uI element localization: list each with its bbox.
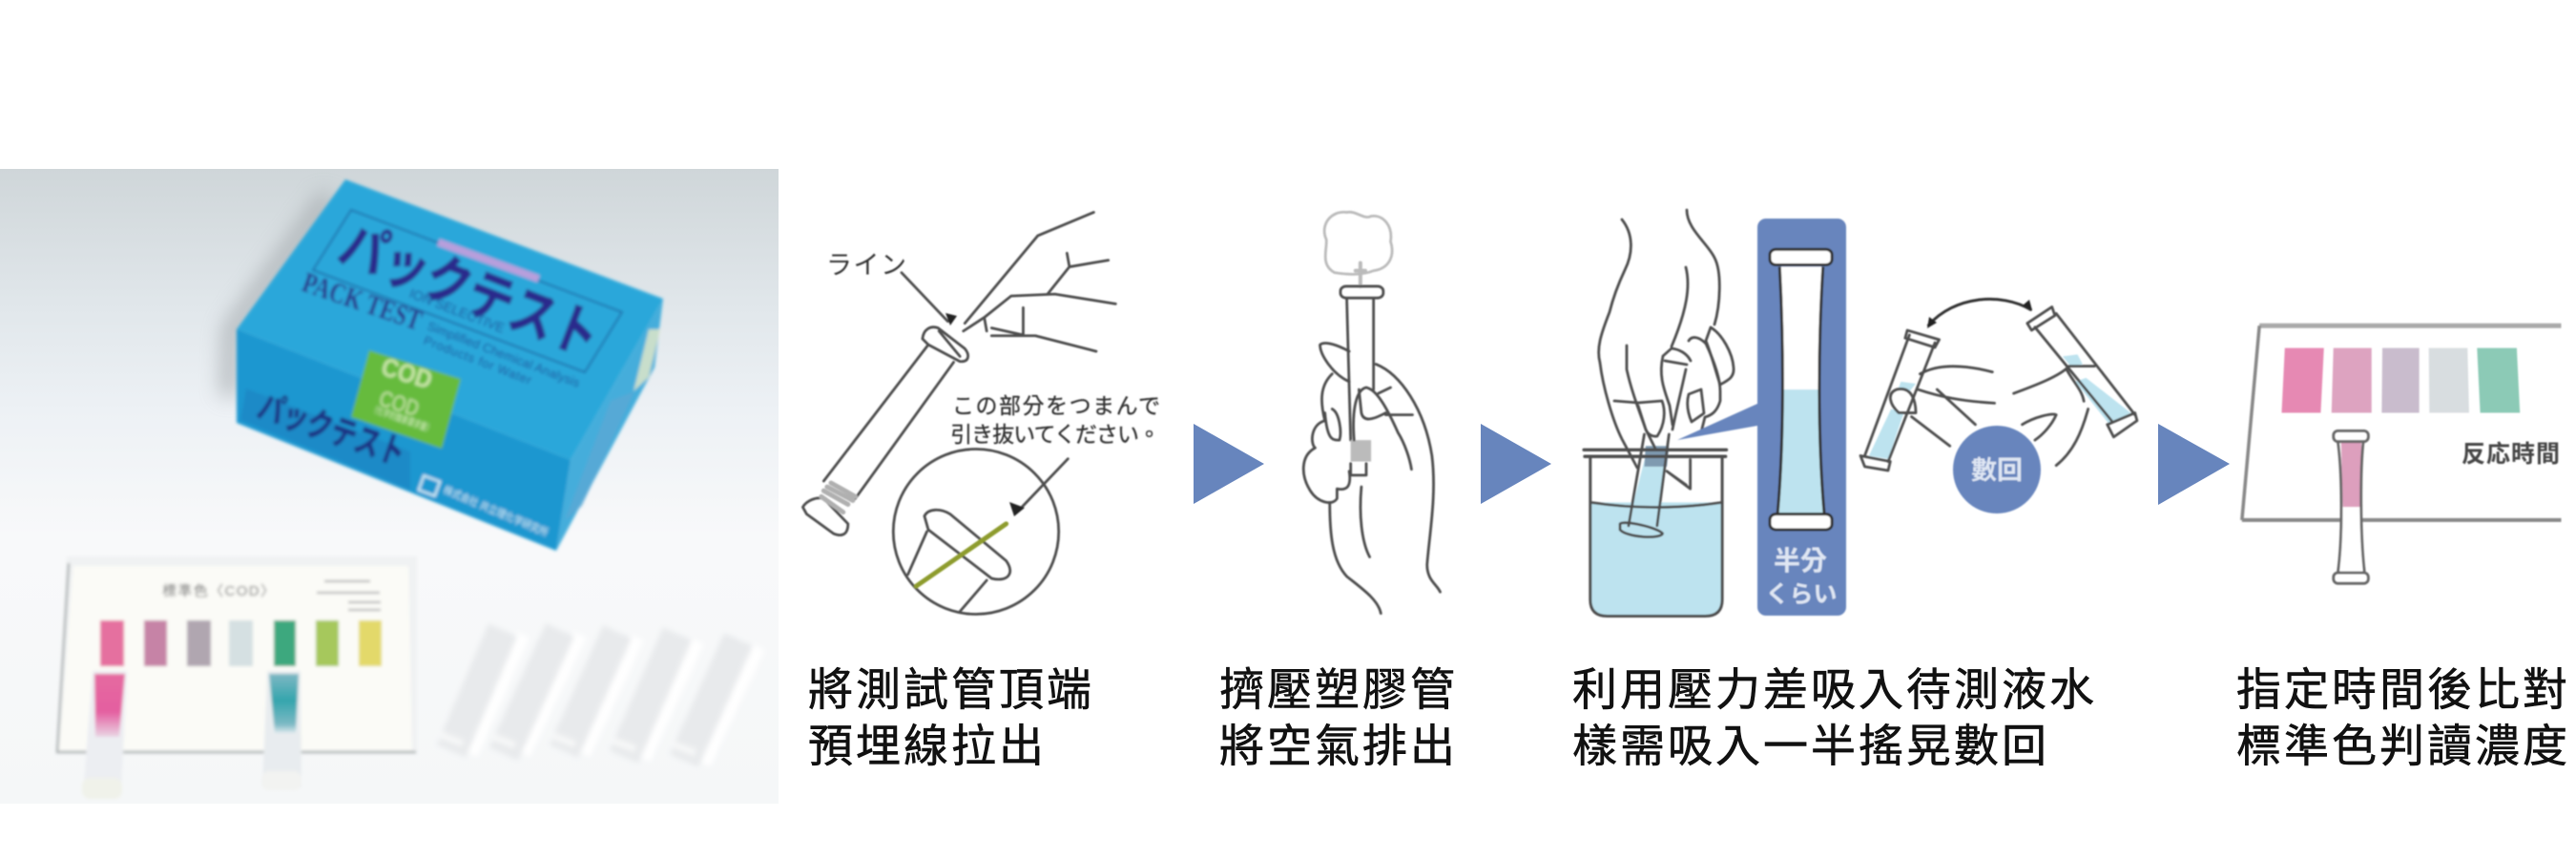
- line arrowhead: [945, 313, 957, 325]
- caption: step 4: [2236, 664, 2570, 771]
- hand holding tube: [1599, 210, 1734, 468]
- company logo: [419, 475, 440, 496]
- caption: step 1: 預埋線拉出: [808, 721, 1047, 771]
- shaking tubes: [1860, 299, 2137, 513]
- caption: step 1: 將測試管頂端: [808, 664, 1094, 715]
- beaker water: [1590, 446, 1722, 616]
- colour swatches: [100, 620, 382, 666]
- panel: product photo: [0, 169, 779, 859]
- COD note: （化学的酸素要求量）: [369, 403, 435, 435]
- caption: step 3: 樣需吸入一半搖晃數回: [1572, 721, 2049, 771]
- half label: 半分: [1774, 546, 1827, 576]
- caption: step 2: 擠壓塑膠管: [1219, 664, 1458, 715]
- caption: step 2: 將空氣排出: [1219, 721, 1458, 771]
- inset arrowhead: [1009, 502, 1025, 516]
- about label: くらい: [1765, 581, 1838, 608]
- circle badge: [1953, 426, 2041, 513]
- teal sample tube: [261, 671, 301, 790]
- sample tube: [2334, 430, 2368, 583]
- illustration: step 4 compare to standard colours: [2242, 325, 2562, 583]
- box subtitle: ION SELECTIVE: [407, 285, 507, 336]
- caption: step 4: 標準色判讀濃度: [2236, 721, 2570, 771]
- circle badge: 數回: [1971, 456, 2023, 485]
- company name: 株式会社 共立理化学研究所: [442, 483, 551, 539]
- arrow 1: [1194, 424, 1264, 504]
- illustration: step 2 squeeze: [1303, 212, 1441, 614]
- instruction: pinch: この部分をつまんで: [952, 393, 1160, 418]
- caption: step 1: [808, 664, 1094, 771]
- COD small: COD: [377, 386, 422, 421]
- box descriptor second line: Products for Water: [422, 333, 534, 388]
- colour chart card: [57, 556, 417, 799]
- callout wedge: [1677, 404, 1757, 440]
- COD big: COD: [378, 352, 436, 395]
- box shadow: [229, 196, 329, 396]
- chart swatches: [2281, 348, 2520, 412]
- half-fill panel: [1757, 219, 1846, 616]
- label: line: ライン: [826, 251, 906, 280]
- box logo katakana: パックテスト: [331, 213, 608, 368]
- caption: step 2: [1219, 664, 1458, 771]
- arrow 2: [1481, 424, 1551, 504]
- caption: step 3: [1572, 664, 2097, 771]
- card title: 標準色〈COD〉: [162, 583, 275, 599]
- caption: step 3: 利用壓力差吸入待測液水: [1572, 664, 2097, 715]
- arrow 3: [2158, 424, 2230, 505]
- half-fill tube: [1770, 249, 1832, 530]
- box descriptor: Simplified Chemical Analysis: [426, 319, 582, 390]
- green COD label: [351, 350, 461, 449]
- caption: step 4: 指定時間後比對: [2236, 664, 2570, 715]
- front navy panel: [240, 388, 410, 490]
- box logo latin: PACK TEST: [299, 266, 426, 337]
- colour chart frame: [2242, 325, 2562, 520]
- five empty tubes: [441, 630, 758, 764]
- pink sample tube: [82, 671, 127, 799]
- illustration: step 1 pull the line: [802, 212, 1160, 614]
- card table: [317, 580, 381, 611]
- illustration: step 3 sample into tube: [1584, 210, 2137, 617]
- instruction: pull: 引き抜いてください。: [950, 422, 1160, 447]
- front logo: パックテスト: [253, 387, 410, 473]
- label strip: [437, 239, 540, 283]
- product box: [237, 179, 663, 551]
- rotation arc arrowheads: [1927, 300, 2032, 328]
- label: reaction time: 反応時間: [2462, 441, 2560, 468]
